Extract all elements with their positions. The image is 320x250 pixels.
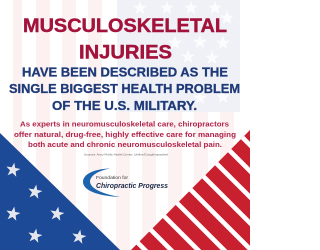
subheading: biggest health problem: OF THE U.S. MILITARY. — [52, 98, 197, 113]
source line: Sources: Army Public Health Center; Lifeline/Googleimpactfeel — [84, 152, 168, 156]
body text: As experts in neuromusculoskeletal care, chiropractors — [20, 120, 229, 128]
heading: musculoskeletal injuries: MUSCULOSKELETAL — [23, 15, 227, 37]
body text — [14, 120, 236, 149]
logo: Foundation for Chiropractic Progress — [83, 168, 168, 197]
red and white stripes triangle — [131, 130, 250, 250]
body text: both acute and chronic neuromusculoskeletal pain. — [28, 140, 222, 149]
logo: Foundation for Chiropractic Progress: Chiropractic Progress — [96, 181, 168, 190]
heading: musculoskeletal injuries — [23, 15, 227, 64]
body text: offer natural, drug-free, highly effective care for managing — [14, 130, 236, 139]
subheading: biggest health problem: HAVE BEEN DESCRIBED AS THE — [22, 64, 228, 80]
heading: musculoskeletal injuries: INJURIES — [79, 42, 172, 64]
blue star triangle — [0, 133, 120, 250]
faint flag background — [0, 0, 250, 250]
icon: blue crescent — [83, 168, 120, 197]
icon: stars — [5, 161, 87, 244]
logo: Foundation for Chiropractic Progress: Foundation for — [96, 175, 128, 181]
subheading: biggest health problem — [9, 64, 240, 113]
subheading: biggest health problem: SINGLE BIGGEST HEALTH PROBLEM — [9, 81, 240, 96]
